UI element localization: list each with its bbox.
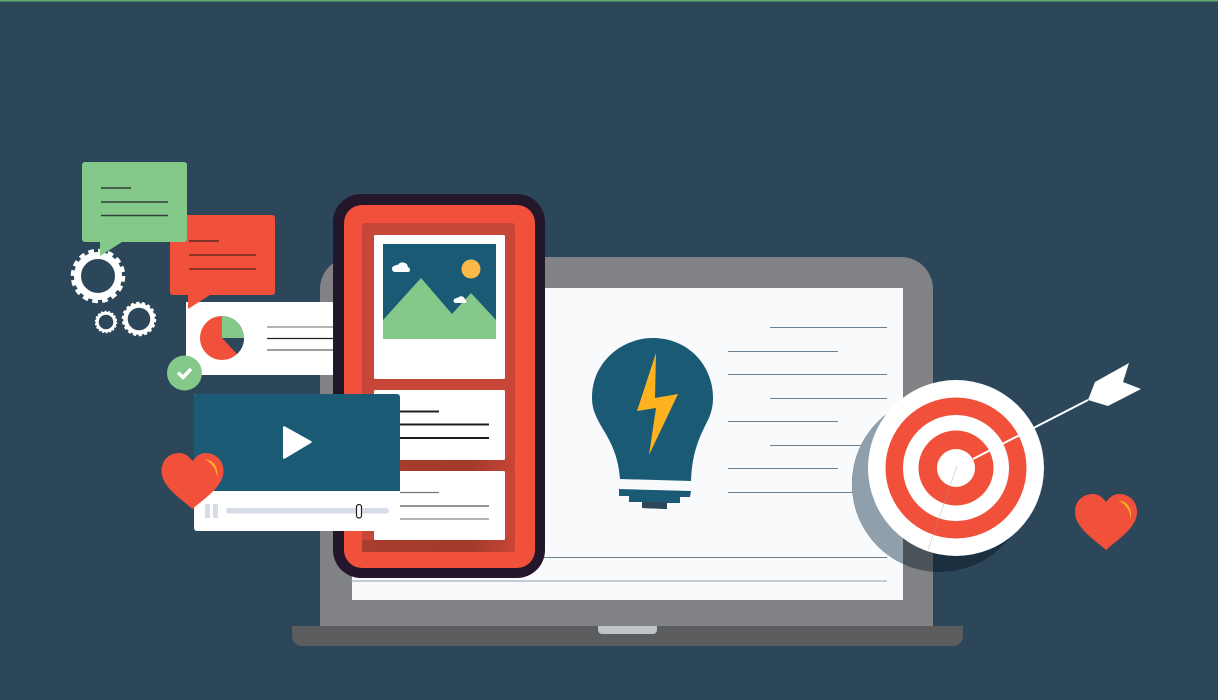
phone body <box>333 194 545 578</box>
text card lower <box>374 471 505 540</box>
icon: check badge <box>167 356 202 390</box>
laptop notch <box>598 626 657 634</box>
bulb base <box>619 489 691 509</box>
target rings <box>868 380 1044 556</box>
target <box>852 363 1141 572</box>
video player <box>194 394 400 531</box>
text card upper <box>374 390 505 460</box>
pause icon <box>205 504 218 518</box>
play icon <box>283 426 312 459</box>
speech bubble: red <box>170 215 275 309</box>
arrow <box>973 363 1141 459</box>
laptop base <box>292 626 963 646</box>
screen text lines <box>350 328 887 581</box>
target shadow <box>852 414 1010 572</box>
sun <box>462 260 480 278</box>
video screen <box>194 394 400 491</box>
mountains <box>383 278 496 339</box>
progress bar <box>226 508 389 514</box>
progress knob <box>356 504 362 518</box>
laptop screen <box>352 288 903 600</box>
top green stripe <box>0 0 1218 2</box>
icon: heart left <box>162 453 224 509</box>
icon: heart right <box>1075 494 1137 550</box>
lightning bolt <box>637 353 678 455</box>
bulb tip <box>642 502 667 509</box>
gear large <box>74 252 122 300</box>
gear medium <box>124 304 154 334</box>
phone red face <box>344 205 535 568</box>
panel: pie chart card <box>186 302 340 375</box>
gear small <box>96 312 116 332</box>
photo sky <box>383 244 496 339</box>
gears <box>74 252 154 334</box>
phone inner panel <box>362 223 515 552</box>
video frame <box>194 394 400 531</box>
pie chart <box>200 316 244 360</box>
photo card <box>374 235 505 379</box>
bulb glass <box>592 338 713 481</box>
icon: light bulb <box>592 338 713 509</box>
cloud left <box>392 262 410 272</box>
laptop <box>292 257 963 646</box>
speech bubble: green <box>82 162 187 256</box>
phone <box>333 194 545 578</box>
cloud right <box>453 296 467 303</box>
card lines <box>267 327 340 350</box>
laptop lid <box>320 257 933 626</box>
